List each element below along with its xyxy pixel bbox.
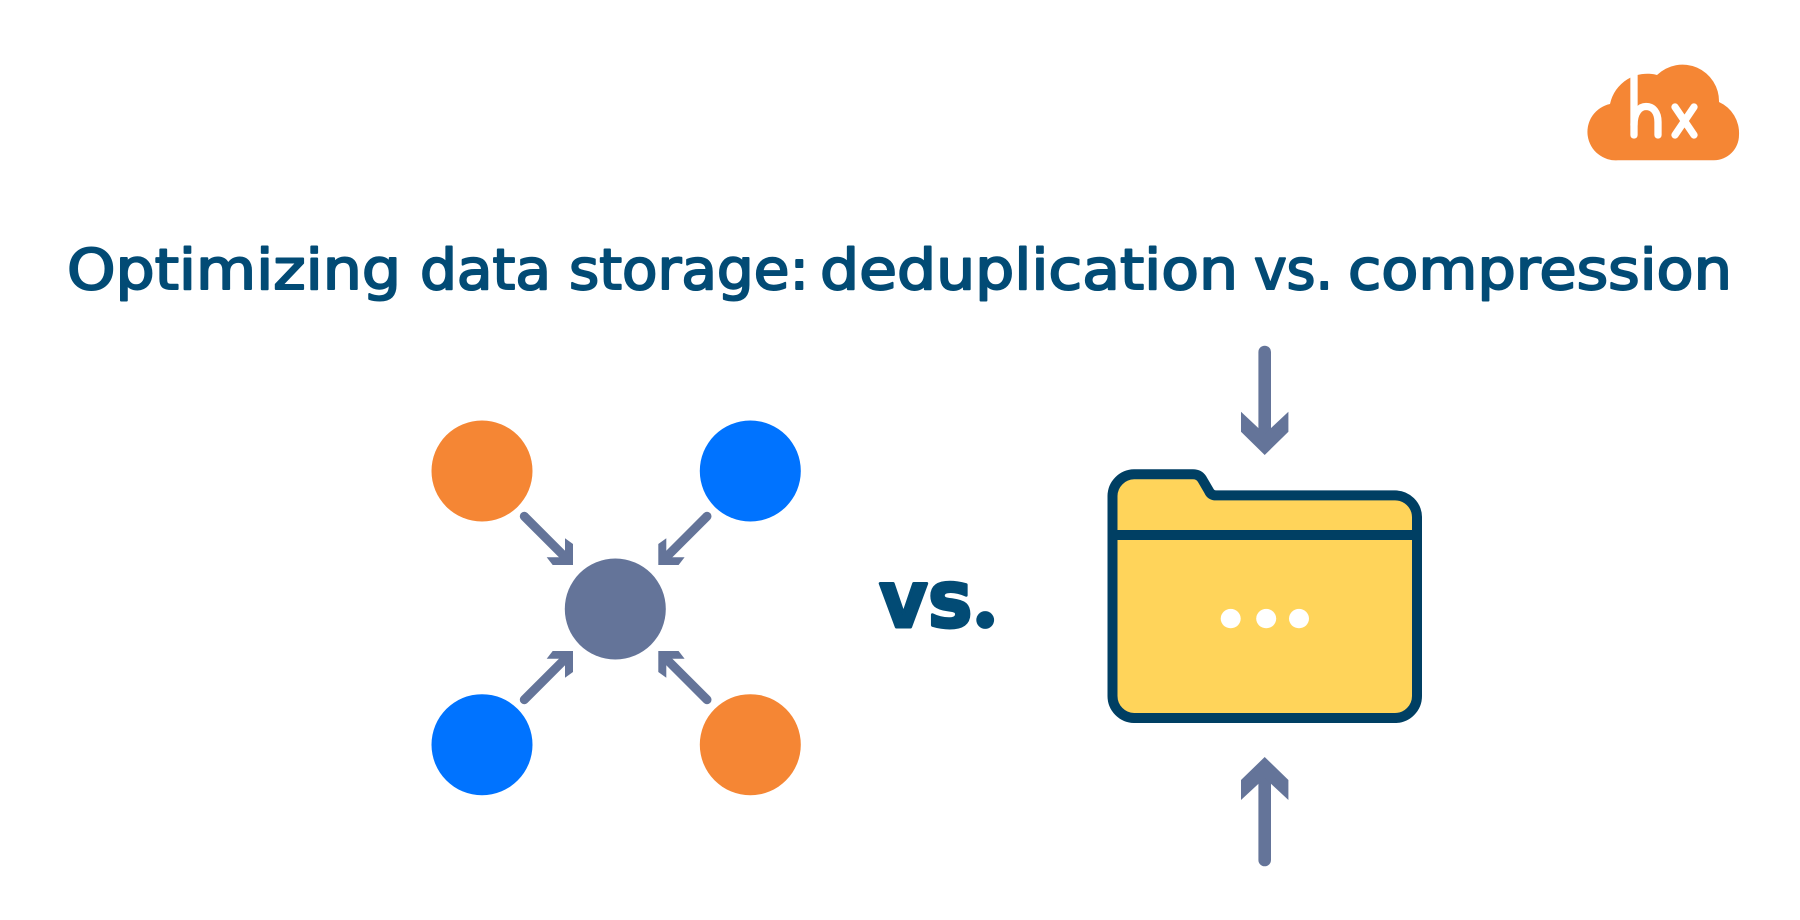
folder body bbox=[1112, 474, 1417, 718]
logo: hx cloud bbox=[1587, 65, 1739, 160]
compression diagram bbox=[1112, 352, 1417, 860]
deduplication diagram bbox=[432, 420, 801, 795]
source circle: bottom right orange bbox=[700, 694, 801, 795]
title: vs. bbox=[1254, 238, 1333, 303]
title: Optimizing bbox=[67, 238, 401, 303]
title bbox=[67, 238, 1732, 303]
folder dots bbox=[1221, 609, 1309, 628]
central merged circle bbox=[565, 558, 666, 660]
arrow: bottom right to centre bbox=[658, 651, 707, 700]
arrow: bottom pointing up bbox=[1241, 757, 1288, 860]
arrow: top right to centre bbox=[658, 516, 707, 565]
vs. label: vs. bbox=[879, 554, 1001, 646]
source circle: top right blue bbox=[700, 420, 801, 522]
title: storage: bbox=[569, 238, 809, 303]
arrow: top left to centre bbox=[524, 516, 573, 565]
folder divider bbox=[1112, 530, 1417, 540]
source circle: bottom left blue bbox=[432, 694, 532, 795]
arrow: bottom left to centre bbox=[524, 651, 573, 700]
title: data bbox=[420, 238, 551, 303]
title: compression bbox=[1348, 238, 1732, 303]
arrow: top pointing down bbox=[1241, 352, 1288, 455]
title: deduplication bbox=[820, 238, 1238, 303]
folder icon bbox=[1112, 474, 1417, 718]
source circle: top left orange bbox=[432, 420, 532, 522]
